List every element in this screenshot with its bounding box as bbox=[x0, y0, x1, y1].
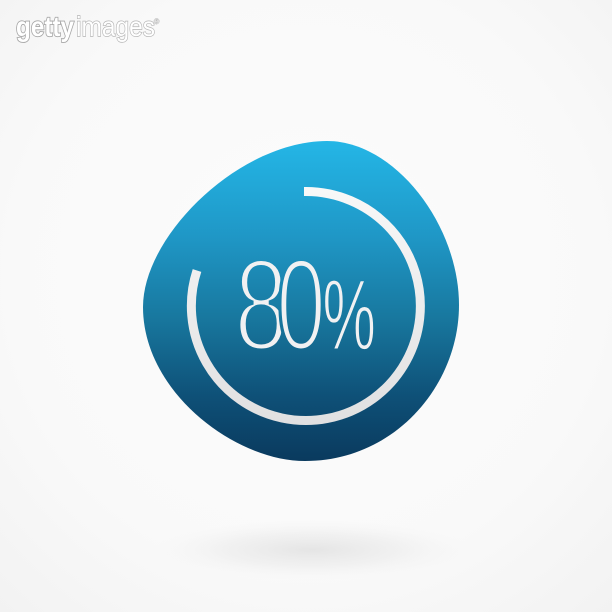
watermark logo: getty bbox=[16, 11, 74, 42]
watermark logo: images bbox=[76, 11, 155, 42]
percentage label bbox=[234, 231, 376, 378]
percentage label: % bbox=[322, 260, 376, 371]
ground shadow bbox=[152, 520, 472, 580]
blue blob badge bbox=[143, 141, 459, 461]
percentage label: 0 bbox=[276, 231, 326, 378]
percentage label: 8 bbox=[234, 232, 288, 378]
watermark logo bbox=[16, 11, 160, 42]
watermark logo: ® bbox=[154, 18, 160, 26]
progress ring 80 percent bbox=[191, 192, 420, 420]
